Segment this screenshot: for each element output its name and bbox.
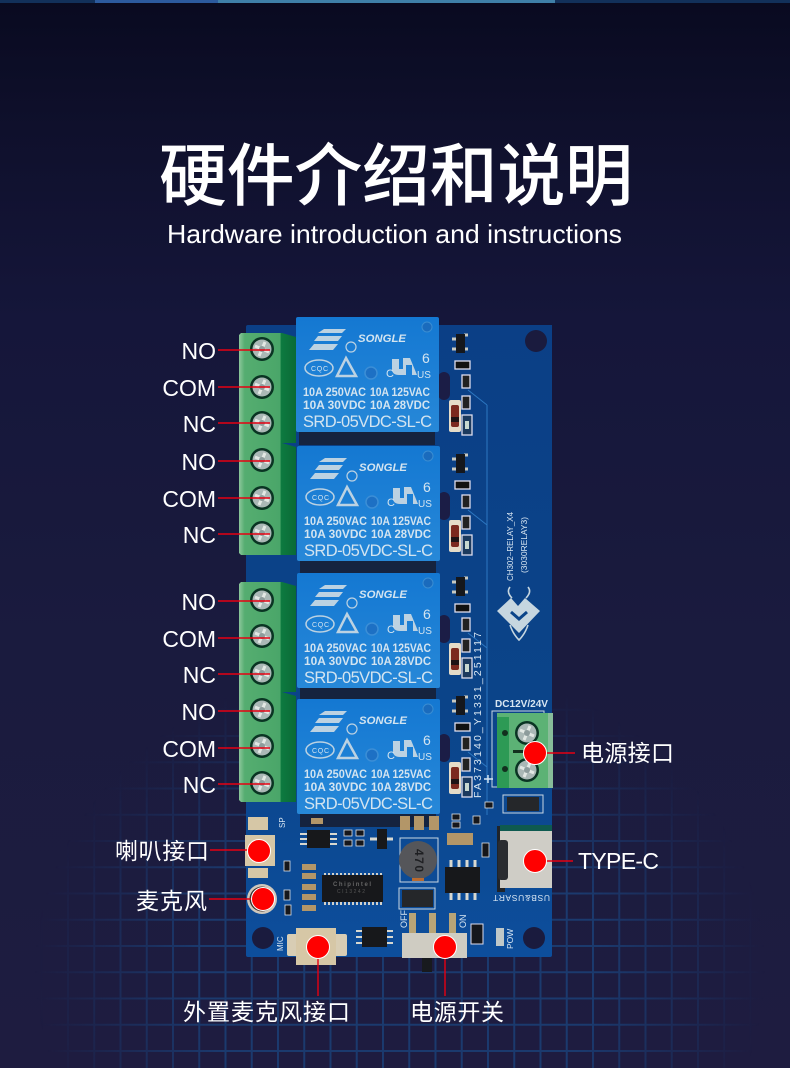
callout: NC 3: NC bbox=[183, 662, 216, 688]
terminal block 4 bbox=[239, 692, 296, 802]
main chip: CI13242 bbox=[337, 889, 365, 895]
power led and resistor bbox=[471, 924, 504, 946]
relay 1: CQC bbox=[311, 366, 328, 373]
callout: speaker: 喇叭接口 bbox=[115, 838, 209, 864]
mounting holes bbox=[252, 330, 547, 949]
relay 2 side components bbox=[438, 454, 487, 555]
relay 3: C bbox=[387, 624, 395, 636]
callout: COM 2: COM bbox=[162, 486, 216, 512]
callout: COM 1 bbox=[162, 375, 270, 401]
relay 2: 10A 30VDC bbox=[304, 529, 367, 541]
callout: type-c: TYPE-C bbox=[578, 848, 659, 874]
smd diode lower bbox=[399, 888, 435, 909]
relay 4 side components bbox=[438, 696, 487, 797]
relay 3: SONGLE bbox=[359, 589, 408, 601]
relay 3: 10A 30VDC bbox=[304, 656, 367, 668]
switch markings: POW bbox=[505, 929, 515, 949]
switch markings bbox=[399, 910, 515, 949]
terminal block 3 bbox=[239, 582, 296, 692]
inductor bbox=[399, 838, 438, 882]
power terminal bbox=[484, 699, 553, 788]
relay 2 bbox=[297, 446, 440, 574]
sop chip bottom bbox=[356, 927, 393, 947]
relay 2: SONGLE bbox=[359, 462, 408, 474]
power switch bbox=[402, 913, 467, 972]
inductor: 470 bbox=[412, 849, 426, 872]
relay 4: C bbox=[387, 750, 395, 762]
callout: NC 4 bbox=[183, 772, 270, 798]
callout: external mic bbox=[183, 936, 350, 1025]
relay 1: 10A 28VDC bbox=[370, 400, 430, 412]
callout: external mic: 外置麦克风接口 bbox=[183, 999, 350, 1025]
relay 2: 10A 125VAC bbox=[371, 516, 431, 528]
callout: NC 3 bbox=[183, 662, 270, 688]
relay 4 bbox=[297, 699, 440, 827]
relay 1: US bbox=[417, 370, 431, 381]
callout: NO 2: NO bbox=[182, 449, 216, 475]
callout: COM 4 bbox=[162, 736, 270, 762]
relay 2: 10A 250VAC bbox=[304, 516, 367, 528]
callout: NO 1: NO bbox=[182, 338, 216, 364]
usart marking: USB&USART bbox=[493, 893, 550, 903]
callout: NO 4: NO bbox=[182, 699, 216, 725]
callout: power switch bbox=[410, 936, 504, 1025]
sop chip right bbox=[445, 860, 480, 900]
board marking: CH302−RELAY_X4 bbox=[506, 511, 515, 581]
callout: COM 3 bbox=[162, 626, 270, 652]
board serial: FA373140_Y1331_251117 bbox=[472, 632, 484, 798]
relay 3: CQC bbox=[312, 622, 329, 629]
relay 4: 10A 125VAC bbox=[371, 769, 431, 781]
sop chip left bbox=[300, 830, 337, 848]
callout: NC 4: NC bbox=[183, 772, 216, 798]
callout: NC 2 bbox=[183, 522, 270, 548]
relay 1 bbox=[296, 317, 439, 445]
callout: NC 2: NC bbox=[183, 522, 216, 548]
main chip: Chipintel bbox=[333, 882, 371, 888]
callout: NO 4 bbox=[182, 699, 270, 725]
speaker connector bbox=[245, 817, 275, 878]
callout: speaker bbox=[115, 838, 270, 864]
callout: power input: 电源接口 bbox=[581, 740, 674, 766]
relay 2: 10A 28VDC bbox=[371, 529, 431, 541]
relay 4: 10A 28VDC bbox=[371, 782, 431, 794]
title: 硬件介绍和说明 bbox=[159, 139, 633, 215]
callout: power switch: 电源开关 bbox=[410, 999, 504, 1025]
main chip bbox=[322, 873, 383, 905]
relay 1: C bbox=[386, 368, 394, 380]
pcb bbox=[246, 325, 552, 957]
switch markings: ON bbox=[458, 914, 468, 928]
callout: NC 1: NC bbox=[183, 411, 216, 437]
relay 3: SRD-05VDC-SL-C bbox=[304, 669, 433, 687]
relay 3 bbox=[297, 573, 440, 701]
terminal block 2 bbox=[239, 443, 296, 555]
relay 2: CQC bbox=[312, 495, 329, 502]
relay 1: 10A 125VAC bbox=[370, 387, 430, 399]
relay 2: C bbox=[387, 497, 395, 509]
relay 4: 10A 30VDC bbox=[304, 782, 367, 794]
switch markings: OFF bbox=[399, 910, 409, 928]
callout: COM 1: COM bbox=[162, 375, 216, 401]
mic marking: MIC bbox=[276, 936, 285, 951]
relay 1: 10A 250VAC bbox=[303, 387, 366, 399]
relay 2: 6 bbox=[423, 479, 431, 495]
relay 4: CQC bbox=[312, 748, 329, 755]
type-c connector bbox=[497, 825, 552, 892]
callout: NC 1 bbox=[183, 411, 270, 437]
relay board photo bbox=[239, 317, 553, 972]
relay 3: US bbox=[418, 626, 432, 637]
top colour strip bbox=[0, 0, 790, 3]
relay 3: 10A 28VDC bbox=[371, 656, 431, 668]
small resistors bbox=[284, 802, 493, 915]
capacitors bbox=[302, 816, 473, 911]
relay 2: SRD-05VDC-SL-C bbox=[304, 542, 433, 560]
relay 1: SONGLE bbox=[358, 333, 407, 345]
relay 3: 10A 125VAC bbox=[371, 643, 431, 655]
callout: NO 3: NO bbox=[182, 589, 216, 615]
relay 4: SONGLE bbox=[359, 715, 408, 727]
power terminal: DC12V/24V bbox=[495, 699, 548, 710]
relay 1: 6 bbox=[422, 350, 430, 366]
callout: COM 2 bbox=[162, 486, 270, 512]
callout: type-c bbox=[524, 848, 659, 874]
microphone capsule bbox=[247, 884, 277, 914]
callout: microphone: 麦克风 bbox=[136, 888, 207, 914]
relay 1: SRD-05VDC-SL-C bbox=[303, 413, 432, 431]
callout: NO 3 bbox=[182, 589, 270, 615]
board logo bbox=[497, 587, 540, 640]
relay 1: 10A 30VDC bbox=[303, 400, 366, 412]
callout: COM 3: COM bbox=[162, 626, 216, 652]
transistor bbox=[370, 829, 393, 849]
subtitle: Hardware introduction and instructions bbox=[167, 219, 622, 249]
callout: NO 2 bbox=[182, 449, 270, 475]
relay 4: 10A 250VAC bbox=[304, 769, 367, 781]
external mic connector bbox=[287, 928, 347, 965]
relay 3 side components bbox=[438, 577, 487, 678]
relay 4: US bbox=[418, 752, 432, 763]
speaker marking: SP bbox=[278, 817, 287, 828]
callout: NO 1 bbox=[182, 338, 270, 364]
callout: COM 4: COM bbox=[162, 736, 216, 762]
relay 3: 6 bbox=[423, 606, 431, 622]
relay 4: 6 bbox=[423, 732, 431, 748]
smd diode upper bbox=[503, 795, 543, 813]
terminal block 1 bbox=[239, 333, 296, 443]
relay 4: SRD-05VDC-SL-C bbox=[304, 795, 433, 813]
callout: microphone bbox=[136, 888, 274, 914]
relay 1 side components bbox=[438, 334, 487, 435]
relay 3: 10A 250VAC bbox=[304, 643, 367, 655]
relay 2: US bbox=[418, 499, 432, 510]
callout: power input bbox=[524, 740, 674, 766]
board marking: (3030RELAY3) bbox=[520, 517, 529, 573]
